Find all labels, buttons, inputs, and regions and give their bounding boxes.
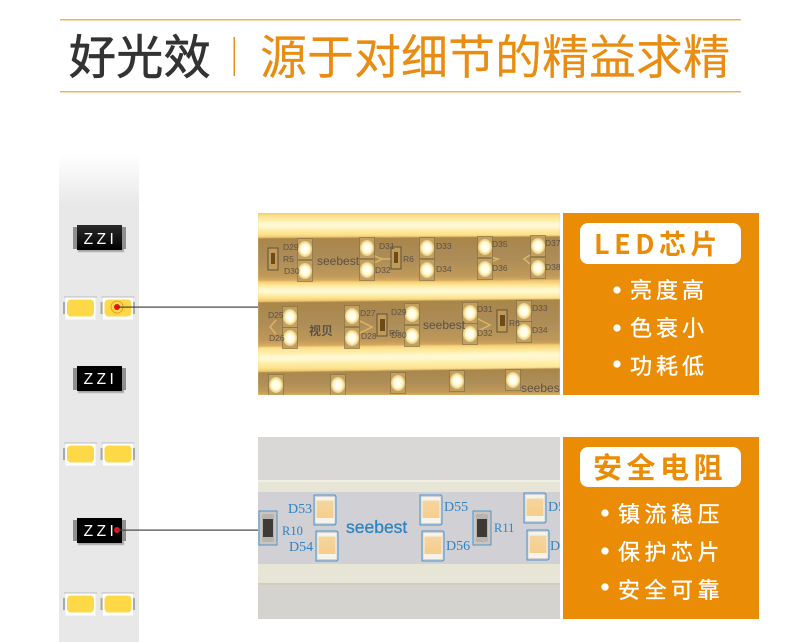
LEDs bbox=[314, 495, 336, 525]
left LED strip diagram bbox=[59, 155, 139, 642]
printed labels: D56 bbox=[446, 539, 470, 554]
printed labels: D26 bbox=[269, 333, 285, 343]
printed labels: D33 bbox=[532, 303, 548, 313]
printed labels: D35 bbox=[492, 239, 508, 249]
printed labels: D31 bbox=[477, 304, 493, 314]
chip: ZZI middle: ZZI bbox=[84, 371, 117, 388]
list: LED chip features: 功耗低 bbox=[630, 349, 708, 381]
LED pair row 3 bbox=[63, 592, 135, 616]
photo: safety resistor strip bbox=[258, 437, 567, 619]
printed labels: D29 bbox=[283, 242, 299, 252]
list: LED chip features: 色衰小 bbox=[630, 311, 708, 343]
resistors bbox=[268, 247, 507, 336]
title: orange: 源于对细节的精益求精 bbox=[260, 19, 730, 88]
panel: safety resistor bbox=[563, 437, 759, 619]
heading pill: LED chip: LED芯片 bbox=[594, 223, 722, 262]
title: dark: 好光效 bbox=[69, 19, 211, 88]
printed labels: seebest bbox=[423, 318, 466, 332]
printed labels: D31 bbox=[379, 241, 395, 251]
printed labels: D5 bbox=[548, 500, 565, 515]
printed labels: D34 bbox=[532, 325, 548, 335]
traces bbox=[270, 255, 530, 334]
header bbox=[60, 19, 741, 92]
LEDs bbox=[298, 238, 312, 260]
heading pill: safety resistor: 安全电阻 bbox=[593, 445, 727, 487]
chip: ZZI lower with target: ZZI bbox=[84, 523, 117, 540]
brand: seebest: seebest bbox=[346, 517, 407, 537]
chip: ZZI top: ZZI bbox=[84, 231, 117, 248]
printed labels: D25 bbox=[268, 310, 284, 320]
printed labels: D30 bbox=[391, 330, 407, 340]
printed labels: D34 bbox=[436, 264, 452, 274]
printed labels: D29 bbox=[391, 307, 407, 317]
printed labels: R6 bbox=[509, 318, 520, 328]
list: LED chip features bbox=[614, 273, 708, 381]
printed labels: D53 bbox=[288, 502, 312, 517]
list: LED chip features: 亮度高 bbox=[630, 273, 708, 305]
printed labels: D54 bbox=[289, 540, 313, 555]
silicone casing bbox=[258, 480, 560, 585]
title divider bbox=[234, 37, 235, 76]
list: resistor features: 镇流稳压 bbox=[618, 497, 724, 529]
printed labels: R11 bbox=[494, 521, 514, 535]
printed labels: R10 bbox=[282, 524, 303, 538]
connector line: resistor bbox=[117, 530, 258, 531]
list: resistor features bbox=[602, 497, 724, 605]
printed labels: D33 bbox=[436, 241, 452, 251]
connector line: LED chip bbox=[117, 306, 258, 308]
printed labels: R5 bbox=[283, 254, 294, 264]
printed labels: seebest bbox=[317, 254, 360, 268]
printed labels: D30 bbox=[284, 266, 300, 276]
chip: ZZI top bbox=[73, 225, 126, 252]
panel: LED chip bbox=[563, 213, 759, 395]
list: resistor features: 保护芯片 bbox=[618, 535, 724, 567]
chip: ZZI middle bbox=[73, 366, 126, 393]
LED pair row 1 with target bbox=[63, 296, 135, 320]
printed labels: D55 bbox=[444, 500, 468, 515]
printed labels: D27 bbox=[360, 308, 376, 318]
printed labels bbox=[268, 238, 564, 395]
printed labels: 视贝 bbox=[309, 322, 333, 339]
band highlights bbox=[258, 222, 560, 361]
printed labels: seebest bbox=[521, 381, 564, 395]
printed labels: D32 bbox=[477, 328, 493, 338]
printed labels: R6 bbox=[403, 254, 414, 264]
printed labels: D37 bbox=[545, 238, 561, 248]
printed labels: D36 bbox=[492, 263, 508, 273]
printed labels: D5 bbox=[550, 539, 567, 554]
printed labels: D32 bbox=[375, 265, 391, 275]
printed labels: D38 bbox=[545, 262, 561, 272]
PCB bbox=[258, 492, 560, 564]
resistors bbox=[259, 511, 277, 545]
LED pair row 2 bbox=[63, 442, 135, 466]
chip: ZZI lower with target bbox=[73, 518, 126, 545]
printed labels bbox=[282, 500, 567, 555]
list: resistor features: 安全可靠 bbox=[618, 573, 724, 605]
photo: glowing LED strips bbox=[258, 212, 564, 396]
printed labels: D28 bbox=[361, 331, 377, 341]
printed labels: R5 bbox=[389, 328, 400, 338]
